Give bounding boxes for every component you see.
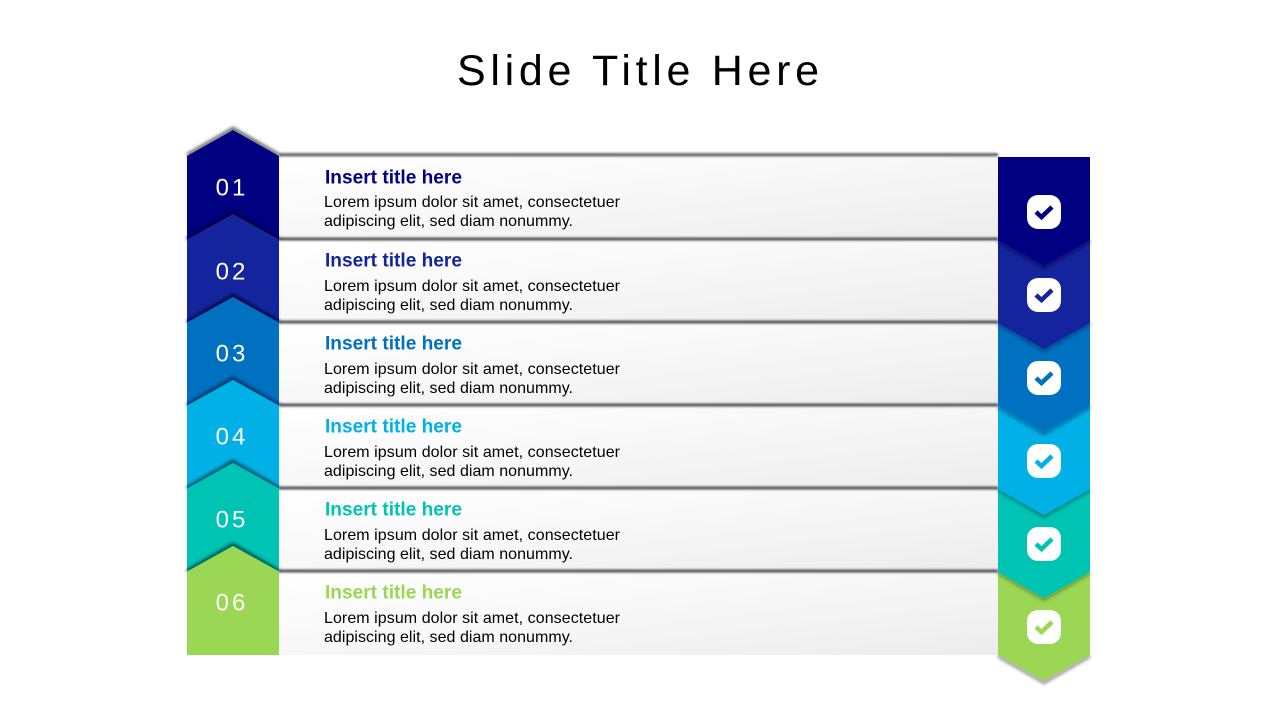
row 4 text: adipiscing elit, sed diam nonummy. [324, 463, 573, 480]
row 4 title: Insert title here [325, 416, 462, 438]
check arrow 2 [998, 231, 1090, 350]
row 6 text: adipiscing elit, sed diam nonummy. [324, 629, 573, 646]
number arrow 03: 03 [216, 340, 248, 368]
right column: check arrows [998, 157, 1090, 682]
number arrow 04 [187, 378, 279, 491]
left column: numbered arrows [187, 128, 279, 655]
check arrow 4 [998, 397, 1090, 516]
row 5 text: Lorem ipsum dolor sit amet, consectetuer [324, 527, 621, 544]
panel: row 6 [279, 570, 998, 655]
panel: row 3 [279, 320, 998, 406]
row 6 text: Lorem ipsum dolor sit amet, consectetuer [324, 610, 621, 627]
row 3 text: Lorem ipsum dolor sit amet, consectetuer [324, 361, 621, 378]
panel: row 5 [279, 486, 998, 572]
panel: row 1 [279, 153, 998, 240]
number arrow 06 [187, 544, 279, 655]
panel: row 4 [279, 404, 998, 489]
panel: row 2 [279, 238, 998, 323]
row 3 text: adipiscing elit, sed diam nonummy. [324, 380, 573, 397]
row 2 title: Insert title here [325, 250, 462, 272]
check arrow 3 [998, 314, 1090, 434]
row 5 title: Insert title here [325, 500, 462, 520]
number arrow 05 [187, 462, 279, 574]
check arrow 6 [998, 560, 1090, 682]
number arrow 06: 06 [216, 590, 248, 616]
row 2 text: adipiscing elit, sed diam nonummy. [324, 297, 573, 314]
row 5 text: adipiscing elit, sed diam nonummy. [324, 546, 573, 563]
number arrow 01: 01 [216, 174, 248, 202]
row 2 text: Lorem ipsum dolor sit amet, consectetuer [324, 278, 621, 295]
row 1 title: Insert title here [325, 168, 462, 188]
row 4 text: Lorem ipsum dolor sit amet, consectetuer [324, 444, 621, 461]
row 1 text: adipiscing elit, sed diam nonummy. [324, 213, 573, 230]
row 3 title: Insert title here [325, 334, 462, 354]
row 1 text: Lorem ipsum dolor sit amet, consectetuer [324, 194, 621, 211]
number arrow 05: 05 [216, 506, 248, 534]
title: Slide Title Here [457, 47, 819, 95]
check arrow 1 [998, 157, 1090, 268]
check arrow 5 [998, 480, 1090, 600]
number arrow 02: 02 [216, 258, 248, 286]
number arrow 04: 04 [216, 424, 248, 450]
row 6 title: Insert title here [325, 582, 462, 604]
number arrow 03 [187, 296, 279, 408]
number arrow 01 [187, 128, 279, 242]
number arrow 02 [187, 212, 279, 325]
